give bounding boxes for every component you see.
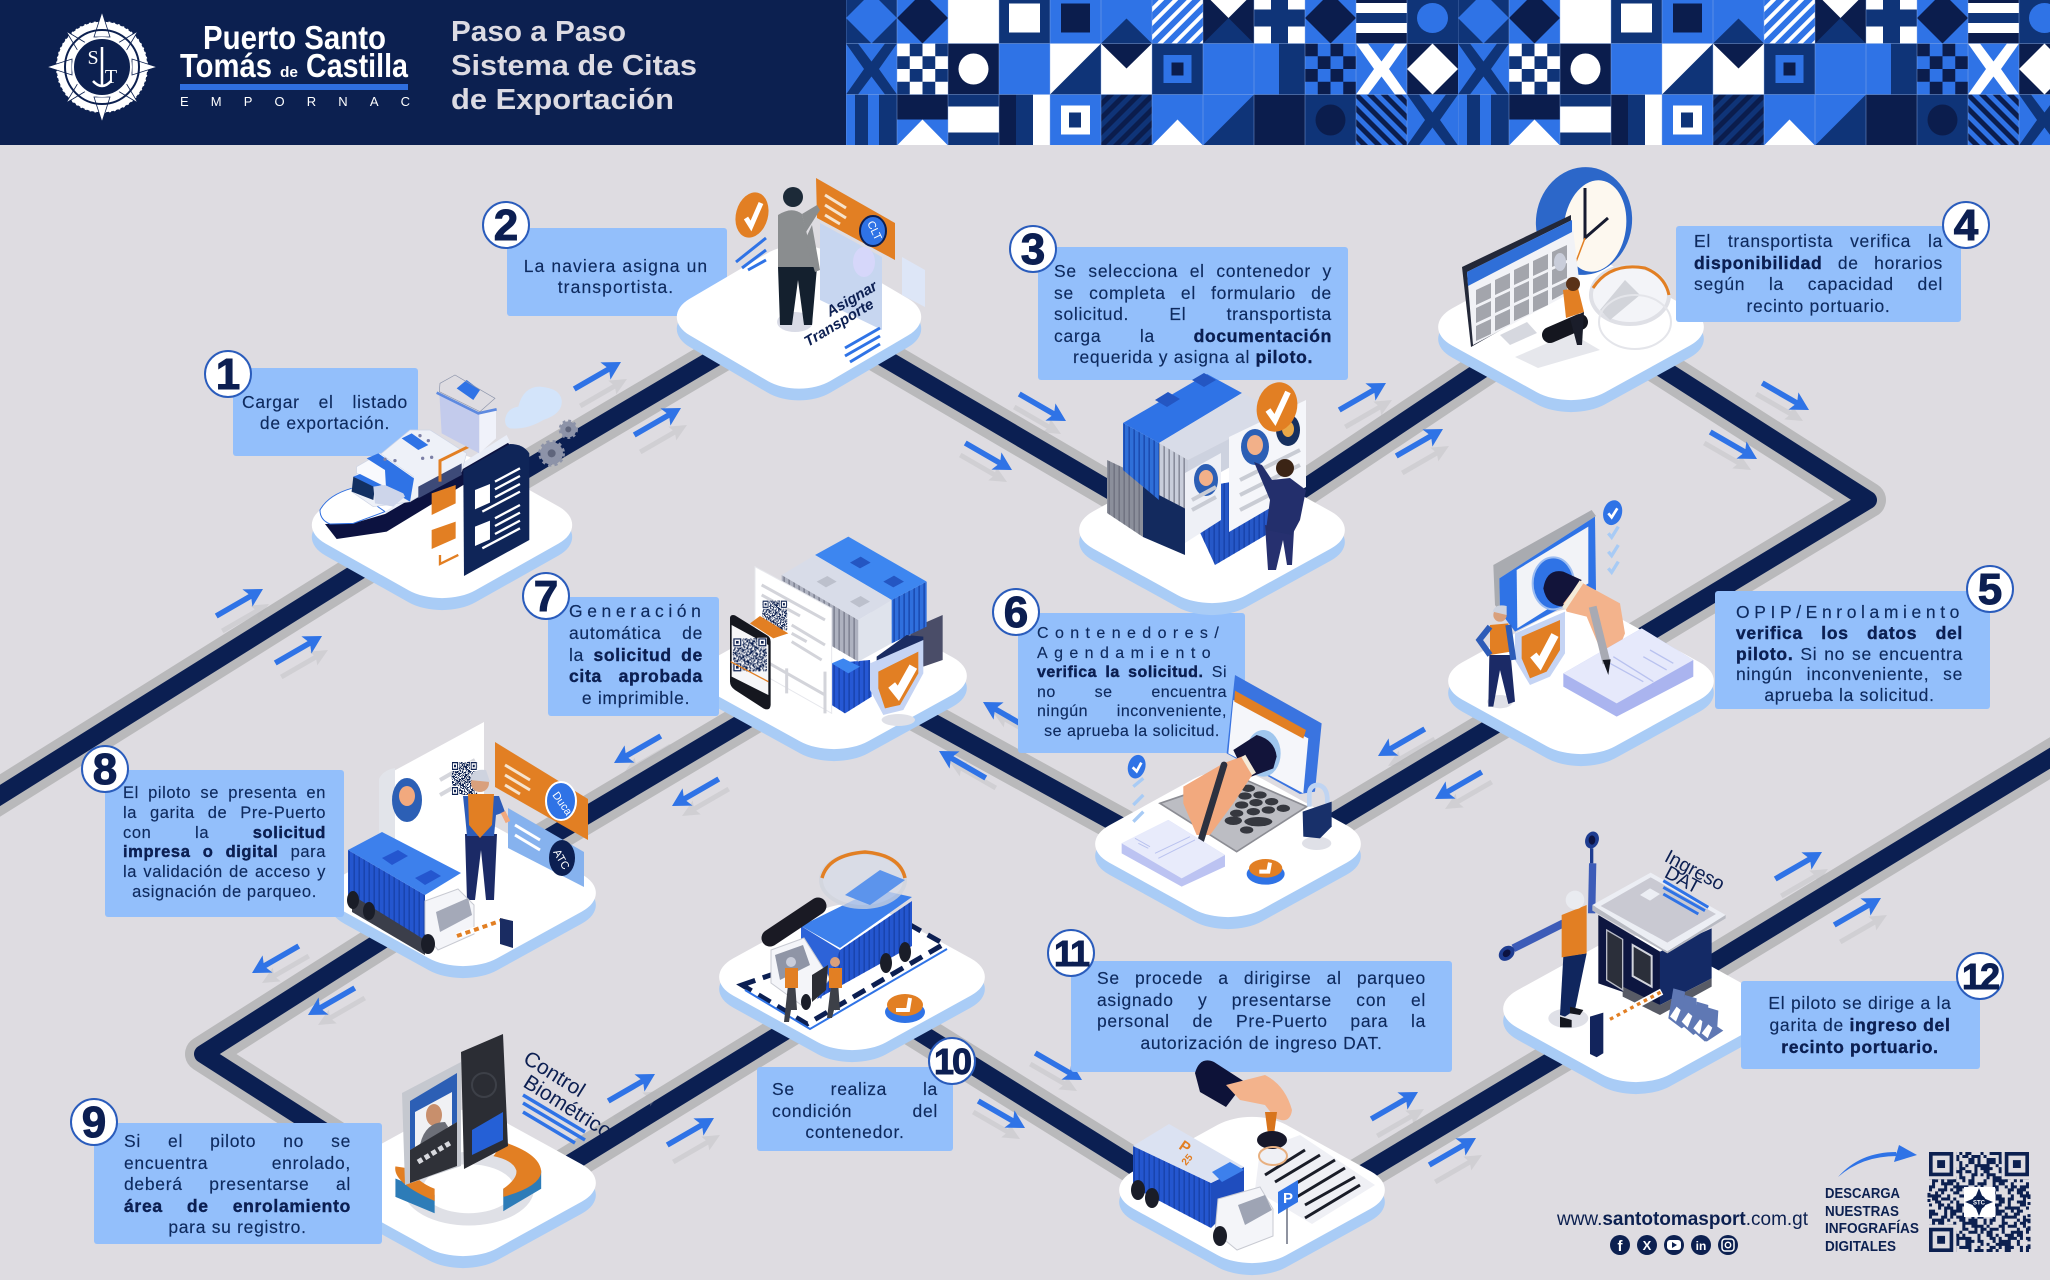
man [777,312,813,332]
platform 2 [658,235,940,411]
step 5 text: aprueba la solicitud. [1764,685,1935,705]
step 1 [204,350,418,456]
button [1247,863,1285,885]
step 4 text: El transportista verifica la [1694,231,1943,251]
bridge tower [439,393,479,453]
header banner [0,0,2050,145]
booth [1598,915,1660,1005]
platform 4 [1418,243,1724,423]
flag pattern band [846,0,2050,145]
step 8 text [123,784,326,901]
step 3 text [1054,261,1332,367]
platform 3 [1059,446,1365,626]
monitor [1462,215,1571,347]
step 11 number: 11 [1054,933,1088,974]
barrier [457,920,503,936]
step 2 [482,201,727,316]
step 12 number [1956,952,2004,1000]
step 7 text: la solicitud de [569,645,703,665]
illustration: container inspection [742,852,947,1029]
paper stack [1563,628,1693,717]
step 11 number [1047,929,1095,977]
worker [465,834,497,900]
keyboard [1515,333,1600,368]
step 5 [1715,565,2014,709]
step 2 text [524,256,708,297]
step 8 number [81,745,129,793]
illustration: calendar and clock [1462,161,1671,368]
light card [820,223,882,330]
step 8 text: impresa o digital para [123,843,326,861]
parking sign [1286,1200,1288,1244]
step 5 text: piloto. Si no se encuentra [1736,644,1963,664]
step 10 text [772,1079,938,1142]
title: Paso a Paso [451,16,626,48]
step 9 text: deberá presentarse al [124,1174,351,1194]
platform 5 [1428,597,1734,777]
logo wordmark: Tomás [180,47,272,84]
step 5 number: 5 [1978,565,2002,614]
logo wordmark: Puerto Santo [203,19,386,56]
gears [540,421,576,465]
label: Control [519,1047,589,1102]
illustration: stamp and parking: P [1283,1190,1293,1207]
padlock [1302,837,1331,850]
workers [784,982,797,1022]
logo compass: T [105,66,117,88]
step 9 [70,1098,382,1244]
button [885,1001,925,1023]
orange arrow [750,616,788,638]
step 9 number [70,1098,118,1146]
person [1265,525,1294,570]
website: www.santotomasport.com.gt [1556,1209,1809,1230]
blue card [508,808,584,887]
hand stamp [1195,1060,1245,1107]
illustration: assign transport: Transporte [801,296,877,350]
step 1 text: Cargar el listado [242,392,408,412]
step 10 text: condición del [772,1100,938,1120]
illustration: pilot at pre-port gate: Duca [550,790,575,818]
orange card [495,742,588,840]
step 9 text: Si el piloto no se [124,1131,351,1151]
worker [1487,695,1513,708]
download label: DIGITALES [1825,1239,1896,1255]
step 8 text: El piloto se presenta en [123,784,326,802]
hull [325,442,510,539]
step 4 text [1694,231,1943,316]
step 7 number: 7 [534,572,558,621]
logo compass: S [87,47,99,69]
title: de Exportación [451,84,674,116]
step 3 text: requerida y asigna al piloto. [1073,347,1313,367]
logo wordmark [180,19,410,109]
step 9 text: encuentra enrolado, [124,1152,351,1172]
illustration: biometric control: Confirmed [416,1126,452,1154]
checks [1600,498,1625,527]
step 6 number [992,588,1040,636]
step 8 number: 8 [93,745,117,794]
step 1 number [204,350,252,398]
platform 8 [310,809,616,989]
step 2 number [482,201,530,249]
jersey barriers [1668,988,1723,1042]
step 11 text: autorización de ingreso DAT. [1140,1033,1383,1053]
illustration: laptop signature [1122,675,1332,887]
step 9 text: para su registro. [168,1217,307,1237]
step 7 [522,572,719,716]
illustration: stamp and parking [1131,1060,1375,1250]
step 5 text [1736,602,1964,705]
step 3 [1009,225,1348,380]
step 4 text: disponibilidad de horarios [1694,253,1943,273]
person sitting [1550,322,1580,335]
dashed area [742,926,944,1024]
arrows along the route [211,353,1891,1189]
title [451,16,697,116]
magnifier [770,906,818,938]
step 1 text [242,392,408,433]
step 4 number [1942,201,1990,249]
step 12 [1741,952,2004,1069]
phone [730,615,771,709]
illustration: stamp and parking: P [1176,1137,1194,1157]
illustration: biometric enrollment check [1479,498,1693,717]
illustration: QR approved containers [730,537,943,726]
road [0,308,2050,1240]
step 6 [992,588,1245,753]
orange ring [395,1142,541,1219]
curved arrow [1838,1145,1917,1177]
QR code: STC [1973,1200,1986,1206]
step 6 text: ningún inconveniente, [1037,703,1227,720]
paper [902,257,925,307]
step 12 number: 12 [1962,956,1998,997]
sleeve and hand [1233,735,1277,778]
illustration: pilot at pre-port gate [347,722,588,955]
logo wordmark: EMPORNAC [180,94,410,109]
step 9 text: área de enrolamiento [124,1196,351,1216]
platform 7 [681,592,987,772]
social icons: X [1643,1238,1652,1253]
illustration: biometric control [395,1034,616,1219]
platform 10 [699,893,1005,1073]
step 6 number: 6 [1004,588,1028,637]
logo wordmark: de [280,64,298,81]
step 5 text: OPIP/Enrolamiento [1736,602,1964,622]
step 3 text: carga la documentación [1054,326,1332,346]
step 10 text: Se realiza la [772,1079,938,1099]
candidate cards [1185,453,1221,543]
step 7 text: e imprimible. [582,688,690,708]
step 11 [1047,929,1452,1072]
screen [1227,675,1322,794]
step 6 text: Agendamiento [1037,645,1217,662]
step 6 text [1036,625,1227,740]
document panel [463,444,529,576]
truck [817,901,912,999]
step 12 text: garita de ingreso del [1769,1015,1951,1035]
illustration: stamp and parking: 25 [1180,1152,1196,1168]
magnifier [1591,266,1669,324]
step 8 [81,745,344,917]
check badge [731,189,773,241]
step 7 text [569,601,705,708]
illustration: assign transport: CLT [864,219,884,243]
step 4 [1676,201,1990,322]
illustration: biometric control: Biométrico [519,1071,616,1143]
step 10 text: contenedor. [805,1122,905,1142]
shield [882,714,915,726]
step 6 text: se aprueba la solicitud. [1044,723,1220,740]
checks [1125,753,1148,780]
step 3 number [1009,225,1057,273]
step 8 text: la validación de acceso y [123,863,326,881]
illustration: entrance gate [1496,830,1728,1057]
step 11 text: Se procede a dirigirse al parqueo [1097,968,1426,988]
download label [1825,1186,1919,1255]
laptop [1160,777,1307,852]
step 2 text: transportista. [558,277,674,297]
step 3 text: solicitud. El transportista [1054,304,1332,324]
step 10 [757,1037,976,1151]
title: Sistema de Citas [451,50,697,82]
hand [1543,571,1582,607]
step 3 text: Se selecciona el contenedor y [1054,261,1332,281]
truck [348,850,425,940]
illustration: entrance gate: DAT [1661,863,1704,899]
illustration: containers and candidates [1107,373,1306,570]
step 12 text: recinto portuario. [1781,1037,1939,1057]
document [755,567,832,713]
step 3 text: se completa el formulario de [1054,282,1332,302]
driver document [379,722,484,920]
step 7 number [522,572,570,620]
pen [1593,607,1607,663]
step 8 text: asignación de parqueo. [132,883,317,901]
step 9 text [124,1131,351,1237]
step 2 text: La naviera asigna un [524,256,708,276]
step 7 text: automática de [569,623,703,643]
step 4 number: 4 [1954,201,1978,250]
step 11 text: personal de Pre-Puerto para la [1097,1011,1426,1031]
orange card [816,178,895,260]
step 7 text: cita aprobada [569,666,703,686]
folders [432,485,456,515]
platform 12 [1483,925,1789,1105]
check badge [1251,378,1303,436]
QR code [1927,1150,2031,1254]
download label: INFOGRAFÍAS [1825,1220,1919,1237]
label: Ingreso [1661,847,1728,895]
step 4 text: según la capacidad del [1694,274,1943,294]
platform 6 [1075,760,1381,940]
step 2 number: 2 [494,201,518,250]
step 7 text: Generación [569,601,705,621]
step 8 text: con la solicitud [123,824,326,842]
logo wordmark: Castilla [306,47,409,84]
step 10 number: 10 [934,1041,970,1082]
logo compass [47,12,157,122]
step 10 number [928,1037,976,1085]
illustration: cargo ship and document [320,375,576,576]
kiosk [402,1062,461,1185]
pen [1200,765,1224,843]
worker [1548,1008,1588,1028]
step 1 number: 1 [216,350,240,399]
download label: DESCARGA [1825,1186,1900,1202]
download label: NUESTRAS [1825,1204,1899,1220]
containers [352,430,467,507]
step 3 number: 3 [1021,225,1045,274]
social icons [1610,1235,1738,1255]
step 5 text: verifica los datos del [1736,623,1963,643]
step 11 text: asignado y presentarse con el [1097,990,1426,1010]
step 4 text: recinto portuario. [1747,296,1890,316]
step 9 number: 9 [82,1098,106,1147]
step 8 text: la garita de Pre-Puerto [123,804,326,822]
illustration: assign transport [731,178,925,362]
step 12 text [1768,993,1952,1057]
crane [440,442,478,482]
clock [1529,161,1639,281]
paper [1255,1135,1375,1224]
step 1 text: de exportación. [260,413,390,433]
illustration: pilot at pre-port gate: ATC [550,848,571,872]
step 11 text [1097,968,1426,1053]
cloud [505,387,562,429]
barrier gate [1600,992,1662,1025]
monitor [1493,510,1596,612]
step 6 text: verifica la solicitud. Si [1037,664,1227,681]
truck [1211,1167,1244,1228]
social icons: f [1618,1238,1624,1255]
platform 1 [292,441,592,621]
paper [1122,820,1225,887]
step 5 number [1966,565,2014,613]
platform 11 [1099,1106,1405,1280]
step 5 text: ningún inconveniente, se [1736,664,1963,684]
social icons: in [1696,1239,1706,1253]
step 6 text: no se encuentra [1037,684,1227,701]
shield [1515,612,1565,685]
step 12 text: El piloto se dirige a la [1768,993,1952,1013]
floor label: Asignar [823,277,881,321]
step 6 text: Contenedores/ [1037,625,1225,642]
platform 9 [310,1099,616,1279]
